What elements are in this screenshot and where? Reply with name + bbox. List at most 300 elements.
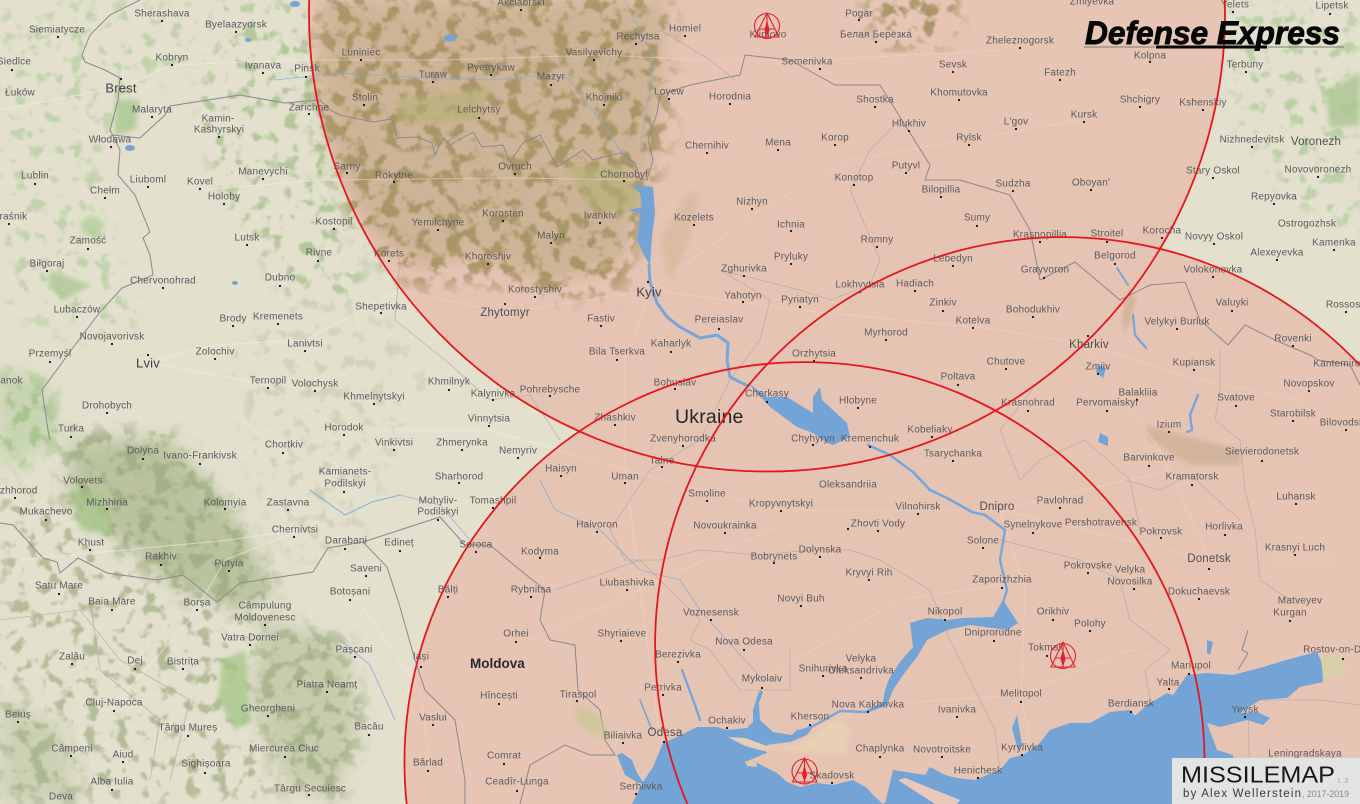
panel: MISSILEMAP credit: by Alex Wellerstein xyxy=(1183,788,1301,800)
city labels: north Ukraine: Rylsk xyxy=(956,132,983,144)
city labels: northwest: Drohobych xyxy=(82,400,132,412)
city labels: north Ukraine: Khomutovka xyxy=(930,88,988,98)
panel: MISSILEMAP credit: 1.3 xyxy=(1337,778,1349,785)
city labels: north Ukraine: Zheleznogorsk xyxy=(986,36,1055,46)
city labels: southwest: Zastavna xyxy=(267,498,310,508)
city labels: north Ukraine: Nizhnedevitsk xyxy=(1220,134,1285,146)
city labels: northwest: Brody xyxy=(219,314,247,324)
city labels: north Ukraine: Bila Tserkva xyxy=(589,346,645,358)
city labels: northwest: Kovel xyxy=(187,176,213,188)
city labels: north Ukraine: Bilopillia xyxy=(922,184,961,196)
city labels: north Ukraine: Hlukhiv xyxy=(892,118,926,130)
city labels: central and east Ukraine: Ivanivka xyxy=(938,704,976,716)
city labels: north Ukraine: Horodnia xyxy=(709,92,751,102)
city labels: north Ukraine: Valuyki xyxy=(1216,298,1248,308)
range circle outlines xyxy=(309,0,1360,804)
city labels: central and east Ukraine: Novotroitske xyxy=(913,744,971,756)
city labels: northwest: Chortkiv xyxy=(265,440,303,450)
icon: launcher marker north xyxy=(754,13,780,38)
city labels: southwest: Bistrița xyxy=(167,656,199,668)
city labels: central and east Ukraine: Chyhyryn xyxy=(791,434,835,444)
city labels: southwest: Borșa xyxy=(183,598,211,608)
city labels: southwest: Darabani xyxy=(325,536,367,546)
city labels: central and east Ukraine: Zhmerynka xyxy=(436,438,488,448)
city labels: central and east Ukraine: Tsarychanka xyxy=(924,448,982,460)
city labels: central and east Ukraine: Tiraspol xyxy=(560,690,596,700)
city labels: north Ukraine: Stary Oskol xyxy=(1186,166,1240,176)
city labels: north Ukraine: Chutove xyxy=(987,356,1026,368)
city labels: north Ukraine: Korocha xyxy=(1143,226,1182,236)
city labels: north Ukraine: Konotop xyxy=(835,172,874,184)
city labels: northwest: Lubaczów xyxy=(54,304,101,316)
city labels: north Ukraine: Ichnia xyxy=(777,220,805,230)
city labels: north Ukraine: Pogar xyxy=(845,8,873,20)
city labels: southwest: Volovets xyxy=(63,476,103,486)
city labels: central and east Ukraine: Melitopol xyxy=(1000,688,1042,700)
city labels: central and east Ukraine: Kropyvnytskyi xyxy=(749,498,813,510)
city labels: central and east Ukraine: Nova Odesa xyxy=(715,636,773,648)
city labels: central and east Ukraine: Sharhorod xyxy=(435,472,483,482)
city labels: north Ukraine: Kyiv xyxy=(636,284,662,300)
city labels: north Ukraine: Yahotyn xyxy=(724,290,762,302)
city labels: southwest: Zalău xyxy=(59,652,85,662)
city labels: northwest: Brest xyxy=(105,80,137,96)
city labels: southwest: Bacău xyxy=(354,722,384,732)
city labels: north Ukraine: Kharkiv xyxy=(1069,339,1109,351)
city labels: north Ukraine: Malyn xyxy=(537,230,565,242)
city labels: central and east Ukraine: Kremenchuk xyxy=(841,434,900,444)
city labels: central and east Ukraine: Uman xyxy=(611,472,639,482)
city labels: central and east Ukraine: Zhashkiv xyxy=(594,412,636,424)
city labels: central and east Ukraine: Tomashpil xyxy=(470,496,516,506)
city labels: northwest: Chervonohrad xyxy=(130,276,196,286)
city labels: southwest: Vatra Dornei xyxy=(221,632,279,644)
panel: MISSILEMAP credit xyxy=(1172,758,1360,804)
city labels: central and east Ukraine: Berezivka xyxy=(655,650,701,660)
city labels: northwest: Dolyna xyxy=(127,446,159,456)
city labels: southwest: Chernivtsi xyxy=(272,524,318,536)
city labels: north Ukraine: Fastiv xyxy=(587,314,615,324)
city labels: north Ukraine: Kolpna xyxy=(1134,50,1166,62)
city labels: central and east Ukraine: Serhiivka xyxy=(620,782,663,792)
city labels: north Ukraine: Lelchytsy xyxy=(457,104,501,116)
city labels: northwest: Ternopil xyxy=(250,376,286,386)
city labels: central and east Ukraine: Starobilsk xyxy=(1270,408,1317,420)
city labels: central and east Ukraine: Comrat xyxy=(487,750,521,762)
city labels: central and east Ukraine: Matveyev xyxy=(1278,596,1322,606)
city labels: southwest: Deva xyxy=(49,792,73,802)
city labels: central and east Ukraine: Svatove xyxy=(1217,392,1255,404)
city labels: north Ukraine: Zhytomyr xyxy=(480,307,530,319)
city labels: central and east Ukraine: Bobrynets xyxy=(751,552,797,562)
city labels: north Ukraine: Lokhvytsia xyxy=(835,280,885,290)
panel: MISSILEMAP credit: MISSILEMAP xyxy=(1181,762,1335,788)
city labels: central and east Ukraine: Zhovti Vody xyxy=(851,518,905,530)
city labels: north Ukraine: Volokonovka xyxy=(1184,264,1243,276)
city labels: north Ukraine: Krasnopillia xyxy=(1013,230,1067,240)
city labels: central and east Ukraine: Leningradskaya xyxy=(1268,748,1342,760)
city labels: north Ukraine: Terbuny xyxy=(1227,60,1263,70)
city labels: north Ukraine: Semenivka xyxy=(781,56,833,68)
city labels: north Ukraine: Khojniki xyxy=(586,92,622,104)
city labels: north Ukraine: Khoroshiv xyxy=(465,252,511,262)
city labels: north Ukraine: Luniniec xyxy=(342,48,380,58)
city labels: southwest xyxy=(0,466,414,802)
city labels: north Ukraine: Putyvl xyxy=(892,160,920,172)
city labels: north Ukraine: Белая Берёзка xyxy=(840,30,912,40)
city labels: central and east Ukraine: Khmilnyk xyxy=(428,376,471,388)
city labels: northwest: Horodok xyxy=(324,422,364,434)
city labels: central and east Ukraine: Dniprorudne xyxy=(964,628,1022,638)
city labels: northwest: Lublin xyxy=(21,170,49,182)
city labels: southwest: Mizhhiria xyxy=(86,498,128,508)
city labels: central and east Ukraine: Nikopol xyxy=(928,606,962,618)
city labels: central and east Ukraine: Zaporizhzhia xyxy=(972,574,1032,586)
city labels: north Ukraine: Korets xyxy=(374,248,404,260)
city labels: central and east Ukraine: Mykolaiv xyxy=(742,674,782,684)
city labels: central and east Ukraine: Novyi Buh xyxy=(777,594,825,604)
city labels: central and east Ukraine: Nova Kakhovka xyxy=(832,700,905,710)
city labels: northwest: Holoby xyxy=(208,192,240,202)
city labels: central and east Ukraine: Zvenyhorodka xyxy=(650,434,716,444)
city labels: north Ukraine: Korosten xyxy=(482,208,524,220)
city labels: north Ukraine: Shostka xyxy=(856,94,894,106)
city labels: central and east Ukraine: Ceadîr-Lunga xyxy=(485,776,549,788)
city labels: northwest: Zamość xyxy=(70,236,106,246)
land over water: Kinburn spit and Tendra xyxy=(572,657,1345,804)
water: reservoirs and lagoons xyxy=(125,1,1213,804)
city labels: central and east Ukraine: Sievierodonetsk xyxy=(1225,446,1300,458)
city labels: central and east Ukraine: Velyka xyxy=(846,654,877,664)
city labels: northwest: Chełm xyxy=(90,186,120,196)
logo: Defense Express: Defense Express xyxy=(1085,15,1340,51)
city labels: northwest: Zarichne xyxy=(289,102,329,114)
city labels: north Ukraine: Sumy xyxy=(964,212,990,224)
city labels: north Ukraine: Ostrogozhsk xyxy=(1278,218,1337,230)
city labels: north Ukraine: Grayvoron xyxy=(1021,264,1069,276)
city labels: north Ukraine: Nizhyn xyxy=(736,196,768,208)
city labels: north Ukraine: Kursk xyxy=(1071,110,1098,120)
city labels: northwest: Kostopil xyxy=(315,216,353,228)
city labels: north Ukraine: Zinkiv xyxy=(929,298,957,308)
city labels: north Ukraine: Homiel xyxy=(669,24,701,34)
city labels: north Ukraine: Kupiansk xyxy=(1173,358,1216,368)
city labels: northwest: Ivanava xyxy=(245,60,281,72)
city labels: southwest: Mukachevo xyxy=(20,506,73,518)
city labels: north Ukraine: Kotelva xyxy=(956,316,991,326)
city labels: central and east Ukraine: Soroca xyxy=(460,540,493,550)
city labels: north Ukraine: Rechytsa xyxy=(616,32,660,42)
city labels: north Ukraine: Orzhytsia xyxy=(792,348,836,360)
city labels: central and east Ukraine: Orikhiv xyxy=(1037,606,1069,618)
city labels: central and east Ukraine: Talne xyxy=(650,456,675,466)
city labels: north Ukraine: Lipetsk xyxy=(1315,0,1349,12)
city labels: northwest: Dubno xyxy=(265,272,295,284)
city labels: north Ukraine: Kozelets xyxy=(674,212,714,224)
city labels: southwest: Pașcani xyxy=(336,644,372,656)
city labels: north Ukraine: Rovenki xyxy=(1274,334,1312,344)
city labels: southwest: Câmpulung xyxy=(239,600,291,612)
city labels: central and east Ukraine: Pavlohrad xyxy=(1037,496,1083,506)
city labels: north Ukraine: Shchigry xyxy=(1120,94,1160,106)
city labels: central and east Ukraine: Liubashivka xyxy=(599,578,655,588)
city labels: southwest: Cluj-Napoca xyxy=(85,698,143,708)
city labels: southwest: Aiud xyxy=(113,750,133,760)
city labels: central and east Ukraine: Polohy xyxy=(1074,618,1106,630)
city labels: central and east Ukraine: Mohyliv- xyxy=(419,496,457,506)
city labels: southwest: Târgu Mureș xyxy=(159,722,217,734)
city labels: southwest: Kolomyia xyxy=(204,498,247,508)
panel: MISSILEMAP credit: , 2017-2019 xyxy=(1302,789,1349,799)
city labels: central and east Ukraine: Barvinkove xyxy=(1123,452,1175,464)
city labels: central and east Ukraine: Bohuslav xyxy=(654,378,696,388)
city labels: central and east Ukraine: Skadovsk xyxy=(810,770,855,782)
city labels: southwest: Alba Iulia xyxy=(90,776,134,788)
city labels: central and east Ukraine: Yalta xyxy=(1156,678,1180,688)
city labels: southwest: Podilskyi xyxy=(324,478,366,490)
city labels: northwest: Pinsk xyxy=(294,64,321,74)
city labels: north Ukraine: Novyy Oskol xyxy=(1185,232,1243,242)
city labels: central and east Ukraine xyxy=(343,376,1360,792)
city labels: central and east Ukraine: Bălți xyxy=(438,584,458,596)
city labels: northwest: Shepetivka xyxy=(355,302,407,312)
city labels: north Ukraine: Ovruch xyxy=(498,162,532,172)
city labels: central and east Ukraine: Oleksandrivka xyxy=(828,666,894,676)
city labels: north Ukraine: Voronezh xyxy=(1291,136,1341,148)
city labels: central and east Ukraine: Kobeliaky xyxy=(907,424,953,436)
water: Black Sea and Sea of Azov xyxy=(632,652,1323,804)
city labels: north Ukraine: Ivankiv xyxy=(584,210,616,222)
city labels: central and east Ukraine: Kodyma xyxy=(521,546,559,558)
city labels: central and east Ukraine: Vinnytsia xyxy=(468,414,510,424)
city labels: central and east Ukraine: Oleksandriia xyxy=(819,480,877,490)
city labels: central and east Ukraine: Biliaivka xyxy=(604,730,642,742)
city labels: northwest xyxy=(0,8,407,462)
city labels: central and east Ukraine: Haivoron xyxy=(576,520,618,530)
city labels: north Ukraine: Myrhorod xyxy=(864,328,908,338)
city labels: north Ukraine: Pyriatyn xyxy=(781,294,819,306)
water: rivers xyxy=(275,0,1198,733)
city labels: north Ukraine: Oboyan' xyxy=(1072,178,1110,188)
city labels: north Ukraine: Sevsk xyxy=(939,60,968,70)
city labels: north Ukraine: Pereiaslav xyxy=(695,314,743,326)
city labels: central and east Ukraine: Solone xyxy=(967,536,999,546)
city labels: central and east Ukraine: Rybnitsa xyxy=(511,584,551,596)
city labels: north Ukraine: Stroitel xyxy=(1091,228,1123,240)
city labels: central and east Ukraine: Iași xyxy=(413,652,429,662)
city labels: central and east Ukraine: Krasnyi Luch xyxy=(1265,542,1325,554)
city labels: north Ukraine: Loyew xyxy=(654,86,685,98)
city labels: central and east Ukraine: Orhei xyxy=(503,628,529,640)
city labels: north Ukraine: Sarny xyxy=(333,162,361,172)
city labels: northwest: Zolochiv xyxy=(196,346,234,358)
city labels: north Ukraine: L'gov xyxy=(1004,116,1028,128)
city labels: north Ukraine: Fatezh xyxy=(1044,68,1076,78)
city labels: central and east Ukraine: Dokuchaevsk xyxy=(1168,586,1231,598)
city labels: northwest: Volochysk xyxy=(292,378,339,390)
city labels: southwest: Kamianets- xyxy=(319,466,371,478)
city labels: central and east Ukraine: Velyka xyxy=(1115,564,1146,576)
city labels: central and east Ukraine: Tokmak xyxy=(1028,642,1065,654)
city labels: north Ukraine: Chernihiv xyxy=(685,140,729,152)
city labels: central and east Ukraine: Nemyriv xyxy=(499,446,537,456)
city labels: central and east Ukraine: Krasnohrad xyxy=(1001,398,1055,408)
city labels: southwest: Miercurea Ciuc xyxy=(249,744,319,754)
city labels: northwest: Kobryn xyxy=(156,52,188,64)
city labels: central and east Ukraine: Kherson xyxy=(791,712,829,722)
city labels: northwest: Lanivtsi xyxy=(287,338,323,350)
city labels: north Ukraine: Bohodukhiv xyxy=(1006,304,1060,316)
city labels: northwest: Włodawa xyxy=(89,134,132,146)
city labels: north Ukraine: Klimovo xyxy=(750,30,787,40)
city labels: north Ukraine: Chornobyl xyxy=(600,170,648,180)
city labels: central and east Ukraine: Chaplynka xyxy=(855,744,905,754)
city labels: central and east Ukraine: Donetsk xyxy=(1187,553,1231,565)
city labels: central and east Ukraine: Bârlad xyxy=(413,758,443,768)
city labels: northwest: Byelaazyorsk xyxy=(205,20,268,30)
city labels: central and east Ukraine: Snihurivka xyxy=(799,664,848,674)
city labels: central and east Ukraine: Podilskyi xyxy=(417,506,459,518)
city labels: southwest: Baia Mare xyxy=(88,596,136,608)
city labels: central and east Ukraine: Vilnohirsk xyxy=(895,502,941,512)
city labels: central and east Ukraine: Novosilka xyxy=(1107,576,1153,588)
icon: launcher marker Tokmak xyxy=(1050,642,1076,669)
city labels: southwest: Botoșani xyxy=(330,586,370,598)
city labels: northwest: Liuboml xyxy=(130,174,166,186)
city labels: southwest: Târgu Secuiesc xyxy=(274,784,346,794)
city labels: southwest: Piatra Neamț xyxy=(297,680,357,690)
city labels: northwest: Novojavorivsk xyxy=(80,332,145,342)
country label: Moldova: Moldova xyxy=(470,656,525,671)
city labels: central and east Ukraine: Mariupol xyxy=(1171,660,1211,672)
city labels: central and east Ukraine: Cherkasy xyxy=(745,388,789,400)
city labels: north Ukraine: Pryluky xyxy=(774,252,808,262)
city labels: northwest: Biłgoraj xyxy=(30,258,64,270)
city labels: north Ukraine: Kaharlyk xyxy=(651,338,692,350)
city labels: north Ukraine: Kshenskiy xyxy=(1179,98,1227,108)
city labels: southwest: Gheorgheni xyxy=(241,704,295,714)
city labels: central and east Ukraine: Horlivka xyxy=(1205,522,1243,532)
city labels: central and east Ukraine: Pershotravensk xyxy=(1065,518,1138,528)
city labels: northwest: Siemiatycze xyxy=(29,24,85,36)
city labels: central and east Ukraine: Henichesk xyxy=(954,766,1003,776)
city labels: central and east Ukraine: Yeysk xyxy=(1231,704,1259,716)
city labels: southwest: Khust xyxy=(78,538,104,548)
city labels: central and east Ukraine: Kryvyi Rih xyxy=(845,568,893,578)
city labels: central and east Ukraine: Pervomaiskyi xyxy=(1076,398,1138,408)
city labels: north Ukraine: Poltava xyxy=(941,372,976,382)
city labels: southwest: Moldovenesc xyxy=(234,612,296,624)
city labels: southwest: Sighișoara xyxy=(181,758,231,770)
city labels: north Ukraine: Rokytne xyxy=(375,170,413,182)
city labels: southwest: Edineț xyxy=(384,538,414,548)
city labels: southwest: Satu Mare xyxy=(35,580,83,592)
city labels: southwest: Rakhiv xyxy=(145,552,177,562)
city labels: northwest: Rivne xyxy=(306,248,333,258)
city labels: northwest: Kashyrskyi xyxy=(194,124,244,136)
city labels: northwest: Kremenets xyxy=(253,312,303,322)
city labels: central and east Ukraine: Izium xyxy=(1157,420,1181,430)
city labels: central and east Ukraine: Pokrovsk xyxy=(1140,526,1183,538)
city labels: north Ukraine: Pyetrykaw xyxy=(467,62,516,74)
city labels: northwest: Łuków xyxy=(5,88,36,98)
city labels: central and east Ukraine: Novoukrainka xyxy=(693,520,757,532)
city labels: north Ukraine: Yemilchyne xyxy=(412,218,465,228)
city labels: northwest: Lviv xyxy=(136,356,160,370)
city labels: central and east Ukraine: Vaslui xyxy=(419,712,447,724)
pink range fill xyxy=(309,0,1360,804)
country label: Ukraine: Ukraine xyxy=(675,406,744,428)
city labels: northwest: Turka xyxy=(58,424,84,434)
city labels: central and east Ukraine: Khmelnytskyi xyxy=(343,392,405,402)
city labels: north Ukraine: Hadiach xyxy=(896,278,934,290)
city labels: north Ukraine: Mazyr xyxy=(537,72,566,82)
city labels: southwest: Beiuș xyxy=(5,710,31,720)
city labels: north Ukraine: Lebedyn xyxy=(933,254,973,264)
city labels: southwest: Câmpeni xyxy=(51,744,93,754)
city labels: central and east Ukraine: Pokrovske xyxy=(1064,560,1112,572)
city labels: north Ukraine: Sudzha xyxy=(995,178,1031,190)
city labels: north Ukraine: Repyovka xyxy=(1251,192,1297,202)
city labels: central and east Ukraine: Dnipro xyxy=(979,501,1015,513)
city labels: northwest: Sherashava xyxy=(134,8,190,20)
city labels: north Ukraine: Romny xyxy=(861,234,893,246)
city labels: north Ukraine: Korop xyxy=(821,132,849,144)
city labels: northwest: Kamin- xyxy=(202,114,234,124)
city labels: central and east Ukraine: Petrivka xyxy=(644,682,682,694)
city labels: north Ukraine: Kamenka xyxy=(1312,238,1356,248)
city labels: north Ukraine: Alexeyevka xyxy=(1250,248,1304,258)
city labels: central and east Ukraine: Novopskov xyxy=(1283,378,1335,390)
city labels: northwest: Lutsk xyxy=(235,232,260,244)
city labels: northwest: Manevychi xyxy=(238,166,288,178)
city labels: central and east Ukraine: Smoline xyxy=(688,488,726,500)
city labels: central and east Ukraine: Haisyn xyxy=(545,464,577,474)
icon: launcher marker Crimea xyxy=(792,758,817,784)
city labels: northwest: Malaryta xyxy=(132,104,172,116)
city labels: central and east Ukraine: Odesa xyxy=(648,727,683,739)
city labels: north Ukraine: Zmiiv xyxy=(1086,362,1110,372)
city labels: north Ukraine: Vasilyevichy xyxy=(566,48,622,58)
city labels: north Ukraine xyxy=(333,0,1360,382)
city labels: central and east Ukraine: Dolynska xyxy=(799,544,842,556)
city labels: north Ukraine: Zghurivka xyxy=(721,264,767,274)
city labels: central and east Ukraine: Synelnykove xyxy=(1004,520,1063,530)
city labels: central and east Ukraine: Berdiansk xyxy=(1108,698,1155,710)
city labels: central and east Ukraine: Balakliia xyxy=(1118,388,1158,398)
city labels: central and east Ukraine: Kramatorsk xyxy=(1165,472,1219,482)
city labels: central and east Ukraine: Luhansk xyxy=(1276,492,1316,502)
city labels: north Ukraine: Mena xyxy=(765,138,791,148)
city labels: north Ukraine: Korostyshiv xyxy=(508,284,562,296)
city labels: central and east Ukraine: Voznesensk xyxy=(683,608,740,618)
city labels: north Ukraine: Turaw xyxy=(419,70,448,80)
city labels: central and east Ukraine: Kalynivka xyxy=(471,388,516,400)
city labels: north Ukraine: Velykyi Burluk xyxy=(1144,316,1210,328)
city labels: central and east Ukraine: Kyrylivka xyxy=(1001,742,1043,754)
city labels: central and east Ukraine: Hîncești xyxy=(480,690,518,702)
city labels: central and east Ukraine: Pohrebysche xyxy=(520,384,581,396)
city labels: central and east Ukraine: Kurgan xyxy=(1273,608,1307,618)
city labels: northwest: Przemyśl xyxy=(29,348,71,360)
city labels: central and east Ukraine: Ochakiv xyxy=(708,716,746,726)
city labels: central and east Ukraine: Hlobyne xyxy=(839,396,877,406)
city labels: southwest: Putyla xyxy=(214,558,244,570)
city labels: southwest: Dej xyxy=(127,656,143,666)
city labels: north Ukraine: Stolin xyxy=(352,92,378,104)
city labels: north Ukraine: Belgorod xyxy=(1094,250,1136,262)
city labels: central and east Ukraine: Shyriaieve xyxy=(598,628,647,640)
